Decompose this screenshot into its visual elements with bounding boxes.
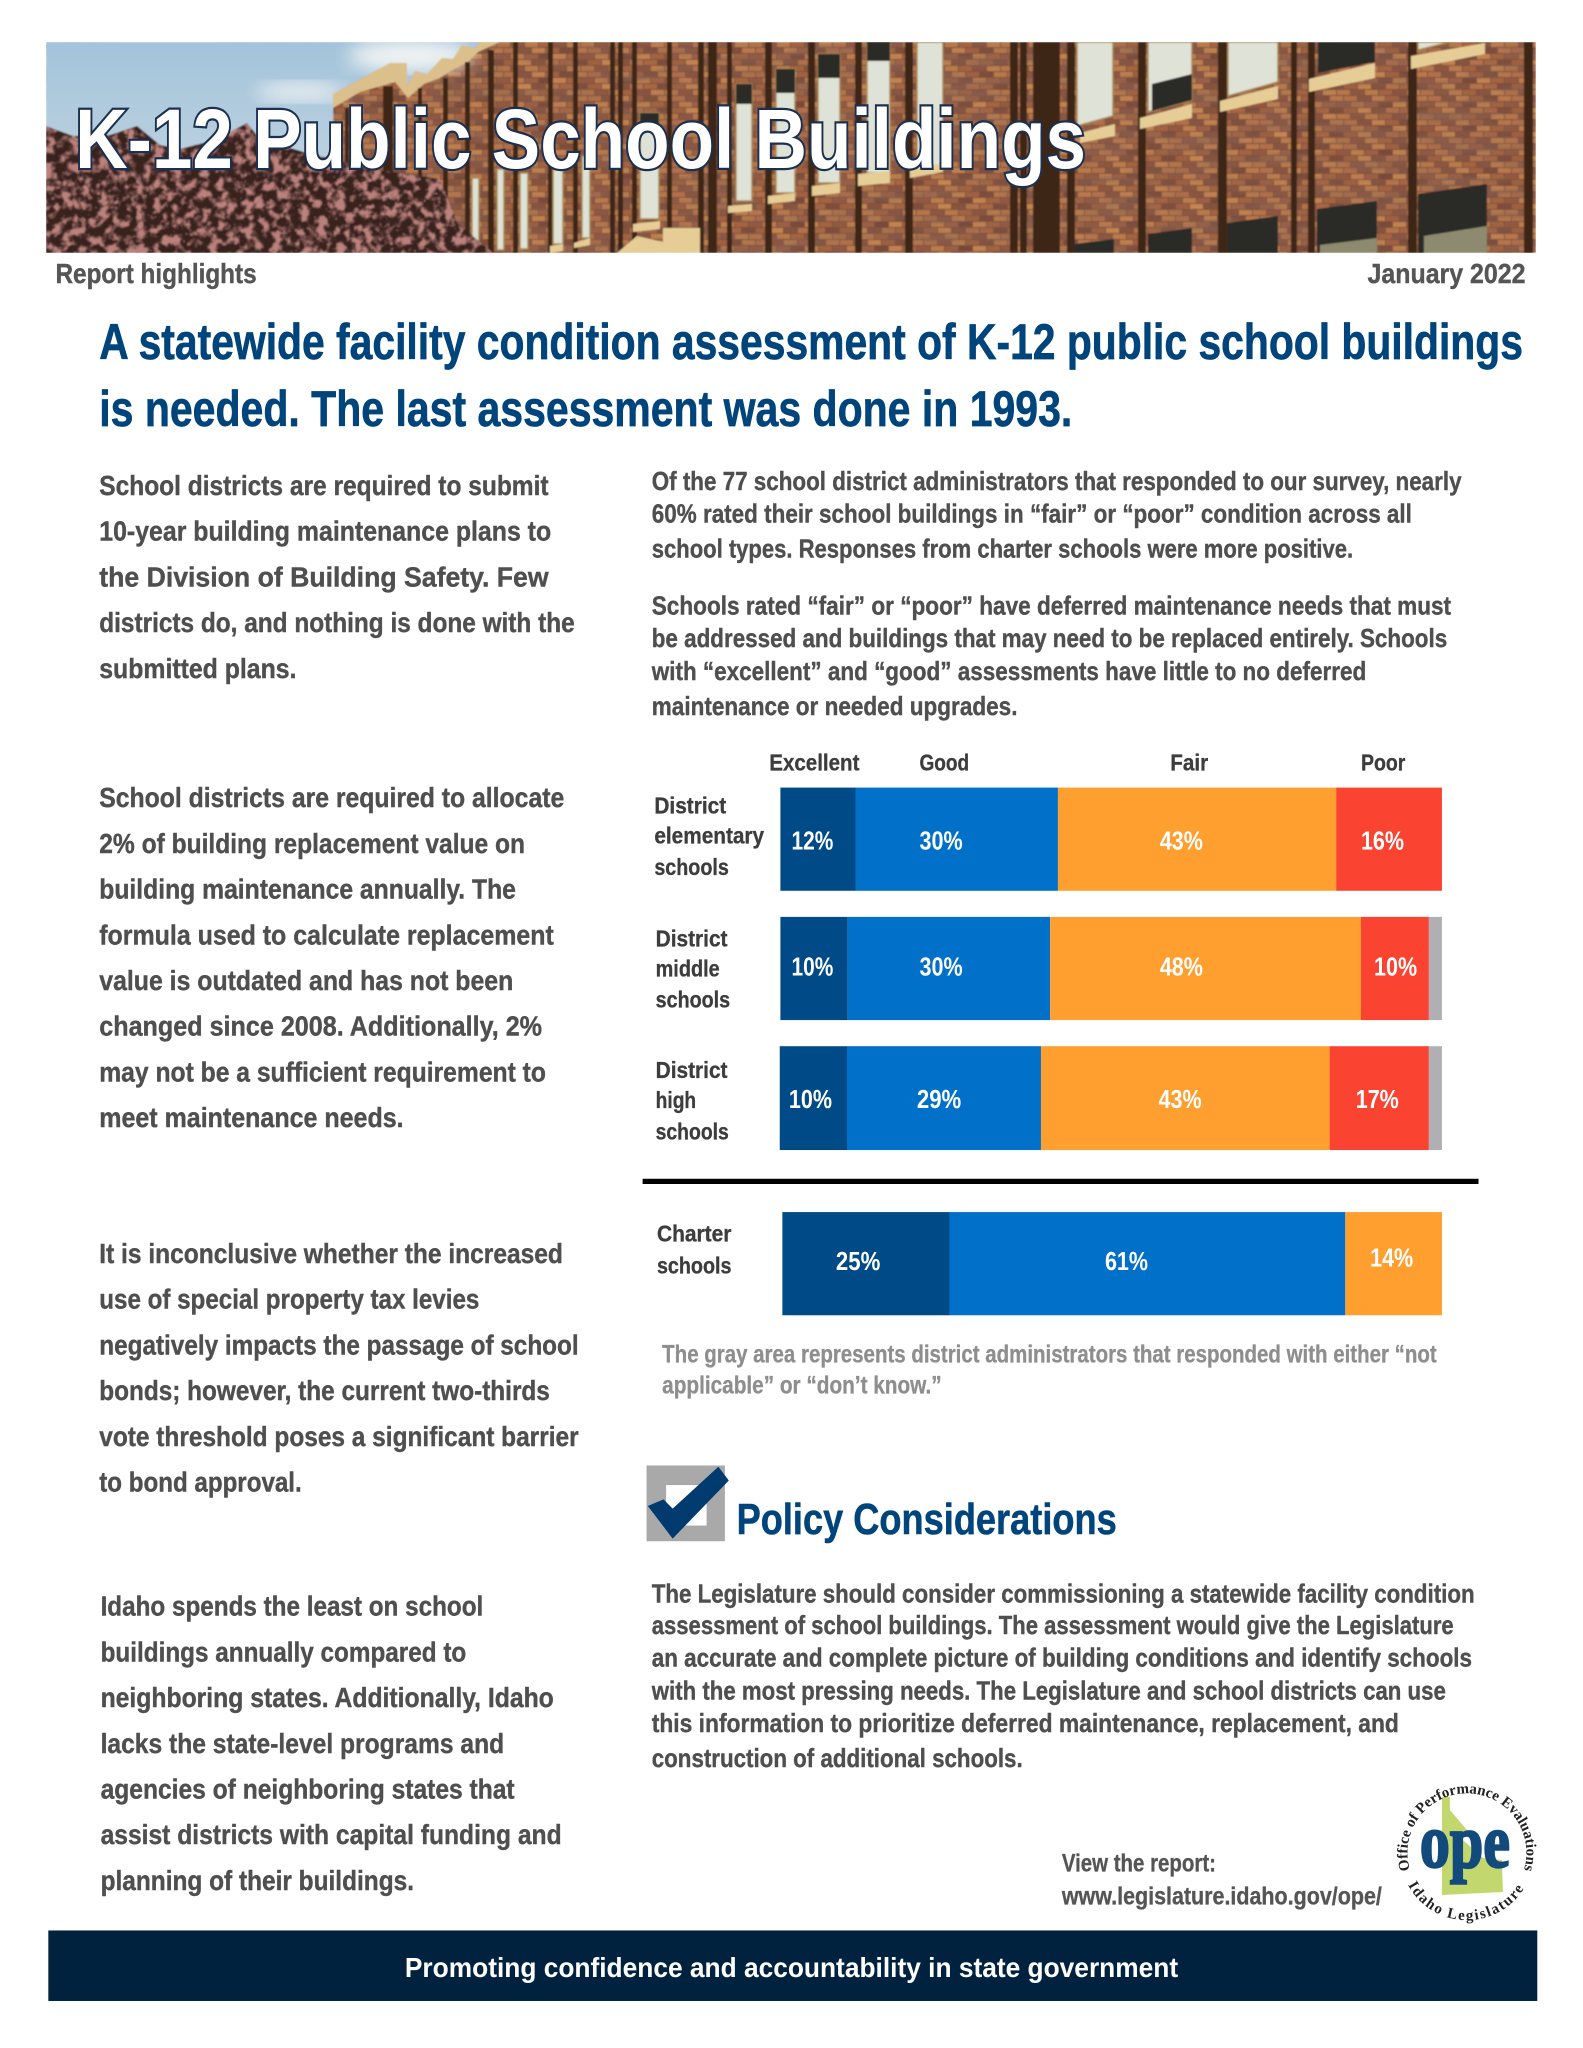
stacked bar chart: school building condition ratings [643,750,1479,1315]
bar: district elementary schools: 16% [1361,826,1404,856]
text block: survey results: Of the 77 school district administrators that responded to our survey, nearly [652,466,1462,496]
bar: district high schools: high [656,1087,696,1113]
bar: charter schools: 61% [1105,1246,1148,1276]
cream sills and entrance [550,43,1485,253]
bar: district middle schools: 48% [1160,952,1203,982]
bar: charter schools [657,1212,1442,1315]
text block: maintenance plans: the Division of Building Safety. Few [99,561,549,592]
bar: charter schools: schools [657,1252,731,1278]
bar: district elementary schools [654,788,1442,891]
logo: Office of Performance Evaluations: Office of Performance Evaluations [1396,1786,1536,1871]
bar: district middle schools: 10% [791,952,833,982]
text block: maintenance plans [99,470,575,684]
lower sash [1320,226,1487,253]
report label: Report highlights [56,258,257,289]
bar: district elementary schools: 43% [1160,826,1203,856]
parapet [333,42,500,108]
report link [1061,1851,1382,1910]
chart footnote: The gray area represents district administrators that responded with either “not [662,1341,1437,1368]
text block: property tax levies: to bond approval. [99,1467,302,1498]
text block: property tax levies: It is inconclusive whether the increased [99,1238,563,1269]
text block: 2% allocation: meet maintenance needs. [99,1102,404,1133]
text block: rating meaning [651,591,1451,721]
text block: rating meaning: be addressed and buildings that may need to be replaced entirely. Schools [652,623,1447,653]
text block: Idaho spending [101,1591,562,1896]
text block: maintenance plans: districts do, and nothing is done with the [99,607,575,638]
report link: View the report: [1062,1851,1216,1878]
logo: Office of Performance Evaluations: ope [1420,1800,1510,1884]
text block: maintenance plans: School districts are required to submit [99,470,549,501]
text block: 2% allocation [99,782,564,1133]
chart legend headers: Good [919,750,969,776]
bar: district high schools: schools [656,1119,729,1145]
chart footnote [662,1341,1437,1400]
text block: policy recommendation: an accurate and complete picture of building conditions and identify schools [652,1643,1472,1673]
text block: 2% allocation: 2% of building replacement value on [99,828,525,859]
upper windows [472,42,1450,250]
chart legend headers: Excellent [769,750,860,776]
chart footnote: applicable” or “don’t know.” [662,1373,942,1400]
report link: www.legislature.idaho.gov/ope/ [1061,1883,1382,1910]
text block: rating meaning: maintenance or needed upgrades. [652,691,1017,721]
text block: 2% allocation: value is outdated and has not been [99,965,513,996]
chart legend headers: Fair [1170,750,1208,776]
text block: property tax levies: vote threshold poses a significant barrier [99,1421,579,1452]
text block: 2% allocation: changed since 2008. Additionally, 2% [99,1011,542,1042]
text block: Idaho spending: buildings annually compared to [101,1636,466,1667]
bar: district high schools: 43% [1159,1084,1202,1114]
text block: property tax levies: negatively impacts the passage of school [99,1329,579,1360]
main heading [99,314,1523,437]
text block: Idaho spending: neighboring states. Additionally, Idaho [101,1682,554,1713]
main heading: is needed. The last assessment was done in 1993. [99,381,1072,437]
bar: district elementary schools: 30% [919,826,963,856]
bar: district high schools: 29% [917,1084,961,1114]
text block: Idaho spending: Idaho spends the least on school [101,1591,483,1622]
text block: 2% allocation: may not be a sufficient requirement to [99,1056,546,1087]
dark piers [345,42,1533,253]
bar: district middle schools: middle [656,955,720,981]
bar: district middle schools: schools [656,987,730,1013]
text block: policy recommendation: this information to prioritize deferred maintenance, replacement, and [652,1708,1399,1738]
bar: district middle schools [656,917,1442,1020]
bar: district elementary schools: District [654,793,726,819]
dark window panes [640,42,1487,253]
bar: district middle schools: District [656,925,728,951]
bar: charter schools: 14% [1370,1242,1413,1272]
bar: district elementary schools: 12% [791,826,833,856]
chart legend headers: Poor [1361,750,1405,776]
text block: Idaho spending: lacks the state-level programs and [101,1728,504,1759]
text block: rating meaning: with “excellent” and “good” assessments have little to no deferred [651,656,1366,686]
brick wall [332,42,1536,253]
date: January 2022 [1367,258,1526,289]
chart legend headers [769,750,1405,776]
bar: charter schools: 25% [836,1246,880,1276]
logo: Office of Performance Evaluations [1396,1786,1536,1924]
heading: policy considerations: Policy Considerations [737,1496,1117,1544]
title: K-12 Public School Buildings [75,91,1086,186]
bar: district high schools: 10% [789,1084,832,1114]
text block: survey results: 60% rated their school buildings in “fair” or “poor” condition across all [652,498,1412,528]
text block: survey results: school types. Responses from charter schools were more positive. [652,534,1353,564]
text block: 2% allocation: building maintenance annually. The [99,874,516,905]
text block: Idaho spending: assist districts with capital funding and [101,1819,562,1850]
text block: policy recommendation [651,1579,1475,1773]
text block: policy recommendation: assessment of school buildings. The assessment would give the Legislature [652,1610,1454,1640]
text block: Idaho spending: planning of their buildings. [101,1865,414,1896]
bar: district high schools: 17% [1356,1084,1399,1114]
bar: district elementary schools: elementary [654,823,764,849]
text block: property tax levies: bonds; however, the current two-thirds [99,1375,550,1406]
text block: policy recommendation: construction of additional schools. [652,1743,1023,1773]
tree [46,123,493,253]
divider between district and charter schools [643,1179,1479,1184]
logo: Office of Performance Evaluations: Idaho Legislature [1408,1880,1524,1924]
bar: district high schools [656,1046,1442,1150]
footer band [48,1930,1537,2001]
bar: district middle schools: 10% [1374,952,1417,982]
footer band: Promoting confidence and accountability in state government [405,1952,1178,1983]
bar: charter schools: Charter [657,1220,731,1246]
text block: maintenance plans: submitted plans. [99,653,296,684]
bar: district high schools: District [656,1057,728,1083]
bar: district middle schools: 30% [919,952,963,982]
text block: survey results [652,466,1462,564]
text block: Idaho spending: agencies of neighboring states that [101,1774,515,1805]
text block: 2% allocation: formula used to calculate replacement [99,919,554,950]
bar: district elementary schools: schools [654,854,729,880]
header banner: brick school building photo [46,40,1536,253]
text block: maintenance plans: 10-year building maintenance plans to [99,516,551,547]
text block: property tax levies: use of special property tax levies [99,1284,479,1315]
text block: 2% allocation: School districts are required to allocate [99,782,564,813]
text block: property tax levies [99,1238,579,1498]
sky [46,42,480,158]
text block: policy recommendation: with the most pressing needs. The Legislature and school districts can use [651,1675,1446,1705]
icon: checked box [647,1465,729,1541]
text block: rating meaning: Schools rated “fair” or “poor” have deferred maintenance needs that must [652,591,1451,621]
